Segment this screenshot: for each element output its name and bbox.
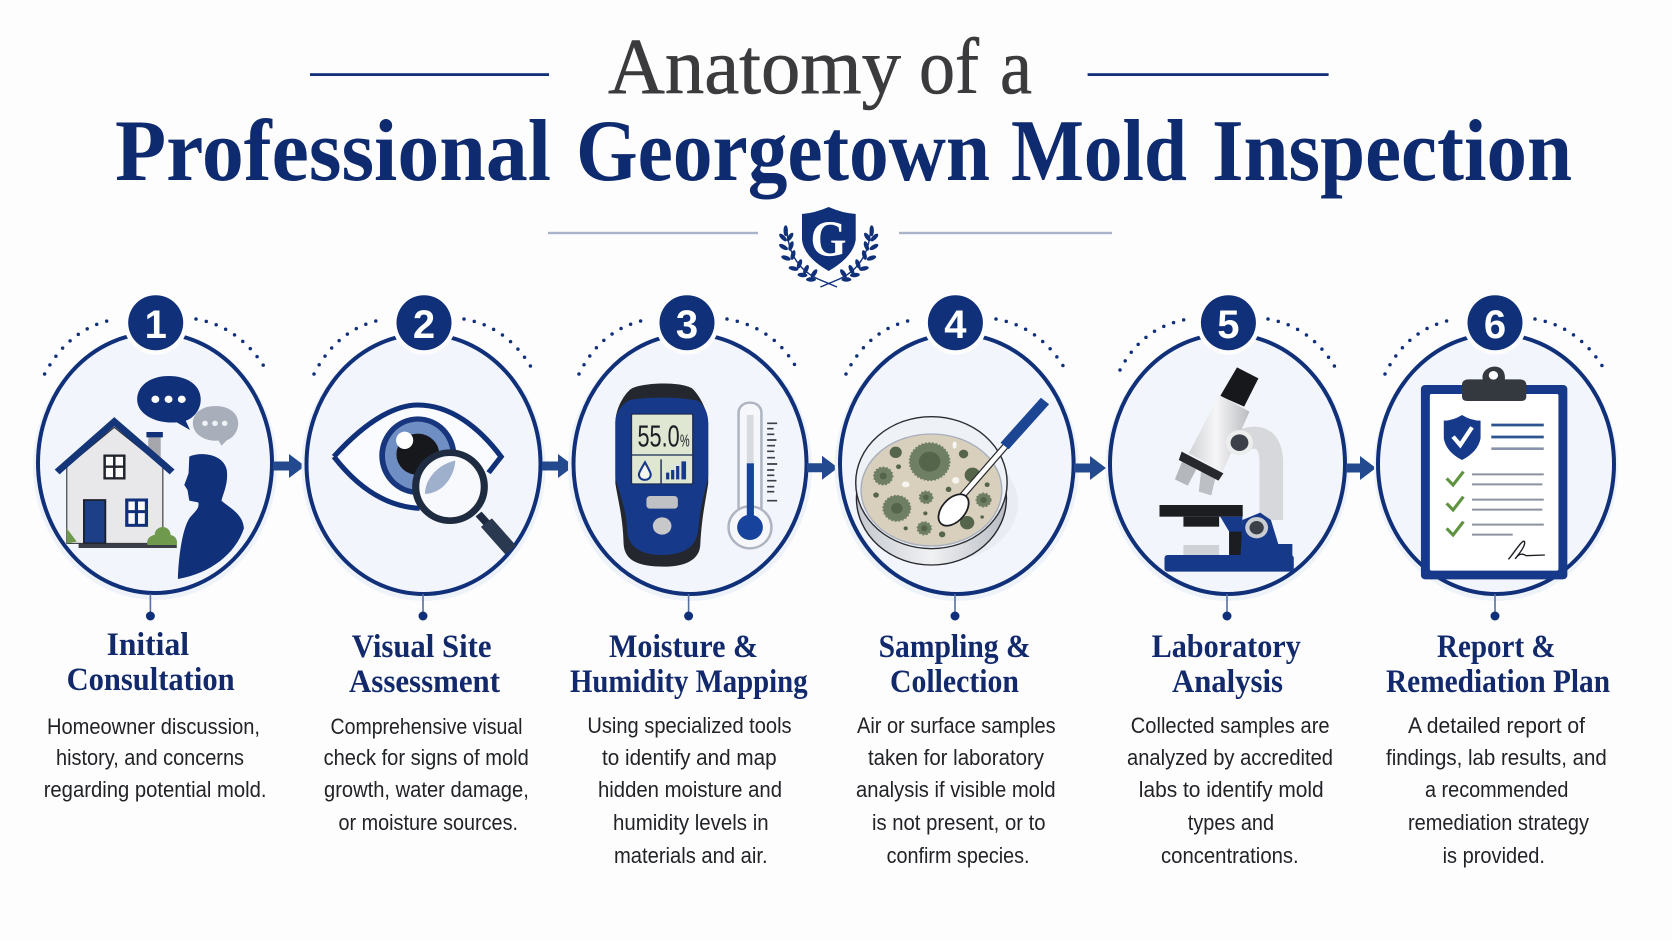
arrow: step 2 to step 3 [542,454,574,478]
description: remediation strategy [1408,810,1589,835]
description [587,713,792,868]
moisture meter: 55.0 [637,419,680,453]
ring [574,334,806,594]
step number 3 [660,295,714,350]
step number 2 [396,295,452,350]
description: labs to identify mold [1139,777,1324,802]
title line 2: Inspection [1212,103,1572,200]
description: Comprehensive visual [330,714,522,739]
shield letter: G [810,212,846,268]
panel: step 3 [568,291,812,620]
step number 4 [928,295,983,350]
heading: Remediation Plan [1386,664,1610,700]
icon: shield crest with laurels [778,207,879,287]
step 6 text [1386,629,1610,868]
ring [306,334,540,594]
left laurel [778,225,837,287]
description: A detailed report of [1408,713,1586,738]
heading [1152,629,1301,700]
title line 1: Anatomy [608,24,901,111]
description: history, and concerns [56,745,244,770]
description: Collected samples are [1131,713,1330,738]
moisture meter [615,383,708,567]
heading [570,629,808,700]
right laurel [820,225,879,287]
title line 2 [115,103,1572,200]
icon: eye and magnifying glass [334,405,511,550]
description: confirm species. [887,843,1030,868]
swab [932,401,1045,531]
step 1 text [44,627,267,802]
description [324,714,529,835]
step number 5: 5 [1217,303,1240,347]
description: growth, water damage, [324,777,529,802]
description: regarding potential mold. [44,777,267,802]
heading: Visual Site [352,629,492,665]
arrow: step 1 to step 2 [273,454,305,478]
heading: Initial [107,627,189,663]
heading: Consultation [67,662,235,698]
step 5 text [1127,629,1333,868]
panel: step 5 [1106,291,1350,620]
description: analysis if visible mold [856,777,1056,802]
panel: step 6 [1374,291,1618,620]
ring [38,333,272,593]
description: or moisture sources. [338,810,518,835]
magnifying glass [416,453,511,550]
heading: Humidity Mapping [570,664,808,700]
speech bubbles [137,376,238,446]
description: is provided. [1443,843,1545,868]
heading: Moisture & [609,629,758,665]
arrow: step 5 to step 6 [1346,456,1376,480]
icon: microscope [1159,367,1294,572]
shield [802,207,856,271]
description [856,713,1056,868]
icon: moisture meter and thermometer [615,383,777,567]
step number 6 [1468,295,1522,350]
ring [840,334,1074,594]
description: to identify and map [602,745,777,770]
description: hidden moisture and [598,777,782,802]
title line 1: of [919,24,980,111]
icon: house, speech bubbles and homeowner [57,376,244,579]
arrow: step 3 to step 4 [807,456,838,480]
step number 6: 6 [1484,303,1506,347]
description: check for signs of mold [324,745,529,770]
title line 2: Georgetown [576,103,990,200]
description: materials and air. [614,843,768,868]
step 3 text [570,629,808,868]
step number 3: 3 [676,303,698,347]
description: findings, lab results, and [1386,745,1607,770]
ring [1378,334,1614,594]
step number 1: 1 [145,303,167,347]
moisture meter: % [680,430,690,451]
description [1127,713,1333,868]
heading [879,629,1031,700]
shield badge [1444,415,1481,460]
step number 2: 2 [413,303,435,347]
title line 1: a [1000,24,1032,111]
ring [1110,334,1345,594]
header [115,24,1572,287]
step 2 text [324,629,529,835]
arrow: step 4 to step 5 [1074,456,1106,480]
description: a recommended [1425,777,1568,802]
heading [1386,629,1610,700]
heading: Analysis [1172,664,1283,700]
heading [349,629,500,700]
heading [67,627,235,698]
panel: step 4 [835,291,1079,620]
step number 4: 4 [944,303,967,347]
panel: step 1 [33,291,277,620]
title line 2: Professional [115,103,551,200]
description: Homeowner discussion, [47,714,260,739]
description: analyzed by accredited [1127,745,1333,770]
description [1386,713,1607,868]
heading: Laboratory [1152,629,1301,665]
panel: step 2 [302,291,546,620]
heading: Collection [890,664,1019,700]
description: types and [1188,810,1274,835]
homeowner silhouette [178,454,244,579]
description: Air or surface samples [857,713,1056,738]
description: taken for laboratory [868,745,1044,770]
icon: petri dish and swab [856,401,1045,565]
description: is not present, or to [872,810,1046,835]
title line 1 [608,24,1032,111]
description: concentrations. [1161,843,1299,868]
description [44,714,267,802]
house [57,422,177,548]
step number 5 [1201,295,1256,350]
heading: Report & [1437,629,1556,665]
thermometer [729,403,777,548]
icon: clipboard report [1421,367,1567,579]
heading: Sampling & [879,629,1031,665]
title line 2: Mold [1011,103,1187,200]
petri dish [856,417,1018,565]
description: Using specialized tools [587,713,792,738]
step number 1 [128,295,183,350]
step 4 text [856,629,1056,868]
description: humidity levels in [613,810,769,835]
heading: Assessment [349,664,500,700]
eye [334,405,501,508]
